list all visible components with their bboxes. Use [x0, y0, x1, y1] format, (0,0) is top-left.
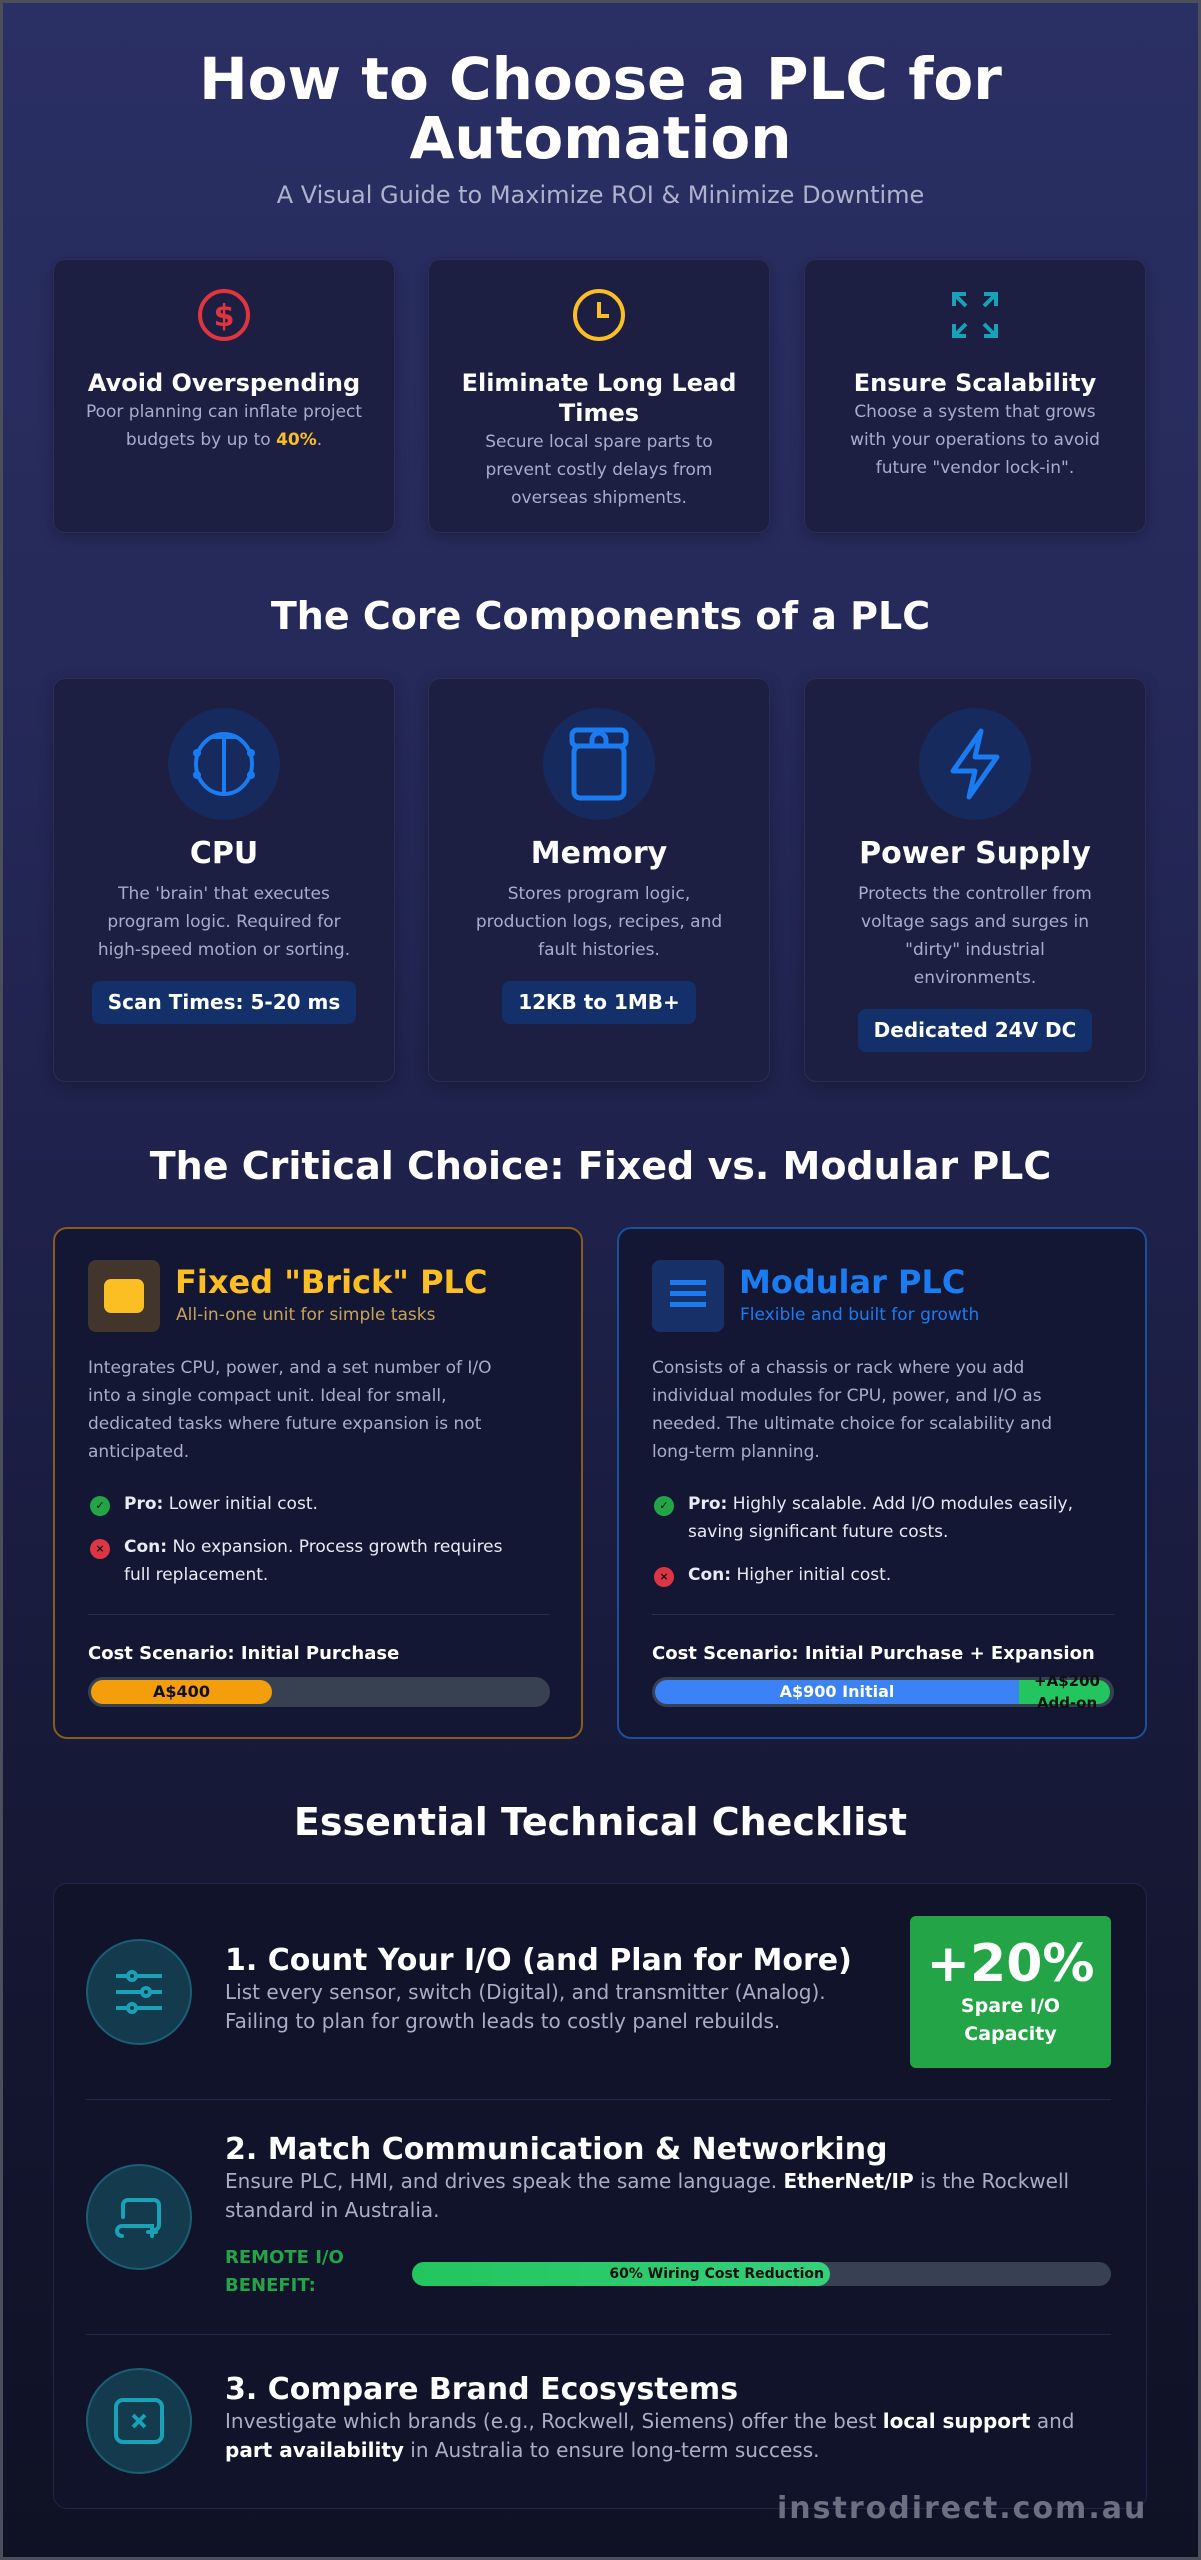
cost scenario bar: +A$200 [1034, 1672, 1100, 1690]
pros cons [654, 1494, 1073, 1587]
panel: avoid overspending: Avoid Overspending [88, 369, 360, 397]
modular description [652, 1358, 1052, 1462]
modular description: individual modules for CPU, power, and I/O as [652, 1386, 1042, 1406]
fixed header: Fixed "Brick" PLC [175, 1263, 487, 1301]
icon: clock [573, 289, 625, 341]
row 2: communication: Ensure PLC, HMI, and drives speak the same language. EtherNet/IP is the Rockwell standard in Australia. [225, 2169, 1069, 2222]
panel: memory [428, 678, 770, 1082]
remote I/O benefit bar: 60% Wiring Cost Reduction [609, 2266, 824, 2282]
icon: modules [652, 1260, 724, 1332]
panel: lead times: Secure local spare parts to prevent costly delays from overseas shipments. [485, 432, 713, 508]
panel: power supply: Power Supply [859, 836, 1091, 871]
callout: +20%: Capacity [964, 2023, 1057, 2045]
icon: brand box [86, 2368, 192, 2474]
panel: scalability: Choose a system that grows with your operations to avoid future "vendor lock-in". [850, 402, 1100, 478]
row 1: count I/O: 1. Count Your I/O (and Plan for More) [225, 1943, 852, 1978]
icon: money: $ [214, 299, 234, 334]
remote I/O benefit bar: REMOTE I/O [225, 2247, 344, 2268]
cost scenario bar: A$400 [153, 1682, 210, 1701]
modular header [652, 1260, 979, 1332]
heading: critical choice: The Critical Choice: Fixed vs. Modular PLC [150, 1144, 1051, 1188]
panel: power supply: environments. [914, 968, 1036, 988]
pros cons: × [95, 1542, 105, 1555]
icon: cpu [168, 708, 280, 820]
fixed header [88, 1260, 487, 1332]
panel: power supply: voltage sags and surges in [861, 912, 1089, 932]
modular header: Modular PLC [739, 1263, 965, 1301]
pros cons: ✓ [659, 1499, 669, 1512]
panel: modular PLC [617, 1227, 1147, 1739]
pros cons: Pro: Lower initial cost. [124, 1494, 318, 1514]
icon: expand [952, 292, 998, 338]
title: How to Choose a PLC for [199, 45, 1002, 113]
title: Automation [409, 104, 792, 172]
remote I/O benefit bar: BENEFIT: [225, 2275, 316, 2296]
pros cons: ✓ [95, 1499, 105, 1512]
pros cons: Pro: Highly scalable. Add I/O modules easily, saving significant future costs. [688, 1494, 1073, 1542]
remote I/O benefit bar [225, 2247, 1111, 2296]
panel: CPU [53, 678, 395, 1082]
pros cons: Con: No expansion. Process growth requires [124, 1537, 502, 1557]
icon: money [198, 289, 250, 341]
row 3: brand ecosystems: 3. Compare Brand Ecosystems [225, 2372, 738, 2407]
row 3: brand ecosystems [86, 2368, 1074, 2474]
panel: avoid overspending [53, 259, 395, 533]
cost scenario bar: A$900 Initial [780, 1682, 894, 1701]
cost scenario bar: Add-on [1037, 1694, 1097, 1712]
modular description: long-term planning. [652, 1442, 820, 1462]
panel: fixed brick PLC [53, 1227, 583, 1739]
panel: scalability [804, 259, 1146, 533]
row 3: brand ecosystems: Investigate which brands (e.g., Rockwell, Siemens) offer the best local support and part availability in Australia to ensure long-term success. [225, 2409, 1074, 2462]
callout: +20% [910, 1916, 1111, 2068]
panel: power supply: Dedicated 24V DC [874, 1018, 1076, 1042]
panel: checklist [53, 1883, 1147, 2509]
panel: memory: Stores program logic, production logs, recipes, and fault histories. [476, 884, 722, 960]
pros cons [90, 1494, 502, 1585]
icon: brick [88, 1260, 160, 1332]
fixed description: Integrates CPU, power, and a set number of I/O into a single compact unit. Ideal for small, dedicated tasks where future expansion is not anticipated. [88, 1358, 491, 1462]
callout: +20%: +20% [926, 1934, 1095, 1994]
modular header: Flexible and built for growth [740, 1305, 979, 1325]
cost scenario bar [88, 1643, 550, 1707]
panel: CPU: CPU [190, 836, 258, 871]
row 1: count I/O: List every sensor, switch (Digital), and transmitter (Analog). Failing to plan for growth leads to costly panel rebuilds. [225, 1980, 826, 2033]
icon: network [86, 2164, 192, 2270]
pros cons: × [659, 1570, 669, 1583]
callout: +20%: Spare I/O [961, 1995, 1060, 2017]
heading: checklist: Essential Technical Checklist [294, 1800, 907, 1844]
panel: CPU: Scan Times: 5-20 ms [108, 990, 340, 1014]
row 1: count I/O [86, 1916, 1111, 2068]
heading: core components: The Core Components of a PLC [271, 594, 930, 638]
icon: memory [543, 708, 655, 820]
modular description: needed. The ultimate choice for scalability and [652, 1414, 1052, 1434]
pros cons: full replacement. [124, 1565, 268, 1585]
subtitle: A Visual Guide to Maximize ROI & Minimize Downtime [277, 181, 924, 209]
cost scenario bar: Cost Scenario: Initial Purchase + Expansion [652, 1643, 1095, 1664]
panel: lead times: Eliminate Long Lead Times [462, 369, 736, 427]
cost scenario bar: Cost Scenario: Initial Purchase [88, 1643, 399, 1664]
panel: memory: 12KB to 1MB+ [518, 990, 680, 1014]
panel: memory: Memory [531, 836, 667, 871]
icon: lightning [919, 708, 1031, 820]
panel: power supply [804, 678, 1146, 1082]
modular description: Consists of a chassis or rack where you add [652, 1358, 1024, 1378]
watermark: instrodirect.com.au [777, 2491, 1147, 2526]
row 2: communication: 2. Match Communication & Networking [225, 2132, 888, 2167]
panel: CPU: The 'brain' that executes program logic. Required for high-speed motion or sorting. [98, 884, 350, 960]
icon: sliders [86, 1939, 192, 2045]
fixed header: All-in-one unit for simple tasks [176, 1305, 435, 1325]
panel: power supply: Protects the controller from [858, 884, 1092, 904]
panel: scalability: Ensure Scalability [854, 369, 1096, 397]
title [199, 45, 1002, 172]
panel: avoid overspending: Poor planning can inflate project budgets by up to 40%. [86, 402, 362, 450]
panel: lead times [428, 259, 770, 533]
panel: power supply: "dirty" industrial [905, 940, 1045, 960]
pros cons: Con: Higher initial cost. [688, 1565, 891, 1585]
row 2: communication [86, 2132, 1111, 2296]
cost scenario bar [652, 1643, 1114, 1712]
